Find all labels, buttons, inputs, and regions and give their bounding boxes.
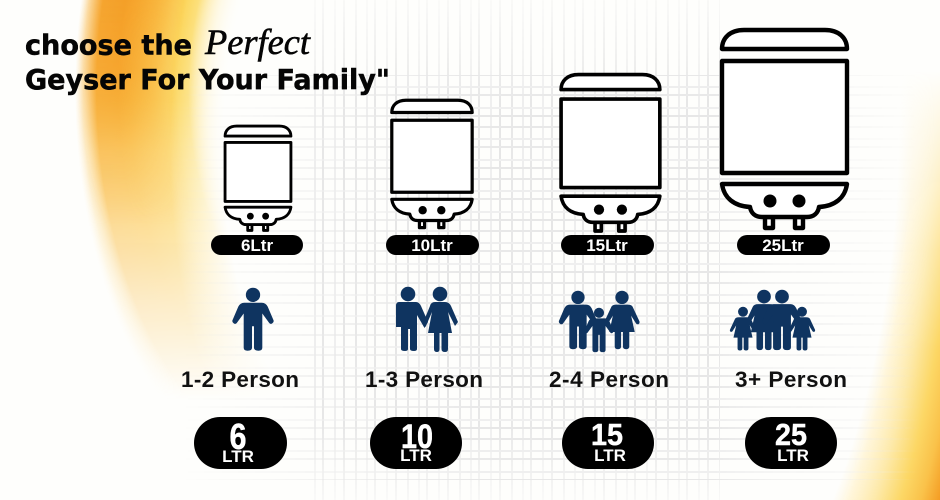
title: Perfect — [204, 22, 311, 62]
person label: 1-2: 1-2 Person — [181, 367, 299, 392]
title: choose the — [25, 28, 192, 62]
label pill: 10Ltr — [386, 235, 479, 255]
capacity badge: 25 LTR: 25 — [775, 417, 807, 452]
capacity badge: 6 LTR — [194, 416, 287, 469]
label pill: 6Ltr — [211, 235, 303, 255]
capacity badge: 15 LTR: LTR — [594, 446, 626, 465]
person label: 1-3: 1-3 Person — [365, 367, 483, 392]
person label: 2-4: 2-4 Person — [549, 367, 669, 392]
icon: 15 litre geyser — [561, 75, 660, 231]
capacity badge: 10 LTR: LTR — [400, 446, 432, 465]
capacity badge: 25 LTR: LTR — [777, 446, 809, 465]
icon: 10 litre geyser — [392, 100, 472, 228]
capacity badge: 10 LTR — [370, 417, 462, 469]
icon: 6 litre geyser — [225, 126, 291, 230]
icon: single person — [232, 288, 274, 351]
capacity badge: 6 LTR: LTR — [222, 447, 254, 466]
icon: 25 litre geyser — [722, 30, 847, 228]
capacity badge: 15 LTR: 15 — [591, 417, 623, 452]
person label: 3+: 3+ Person — [735, 367, 847, 392]
label pill: 6Ltr: 6Ltr — [241, 236, 273, 255]
label pill: 25Ltr: 25Ltr — [762, 236, 804, 255]
icon: family of three — [559, 291, 640, 352]
capacity badge: 10 LTR: 10 — [401, 418, 433, 456]
capacity badge: 15 LTR — [562, 417, 654, 469]
label pill: 15Ltr — [561, 235, 654, 255]
capacity badge: 6 LTR: 6 — [230, 416, 246, 457]
label pill: 15Ltr: 15Ltr — [586, 236, 628, 255]
capacity badge: 25 LTR — [745, 417, 837, 469]
icon: family of four — [730, 290, 815, 351]
title — [25, 22, 390, 96]
title: Geyser For Your Family" — [25, 63, 390, 96]
label pill: 25Ltr — [737, 235, 830, 255]
icon: couple — [396, 287, 458, 352]
label pill: 10Ltr: 10Ltr — [411, 236, 453, 255]
